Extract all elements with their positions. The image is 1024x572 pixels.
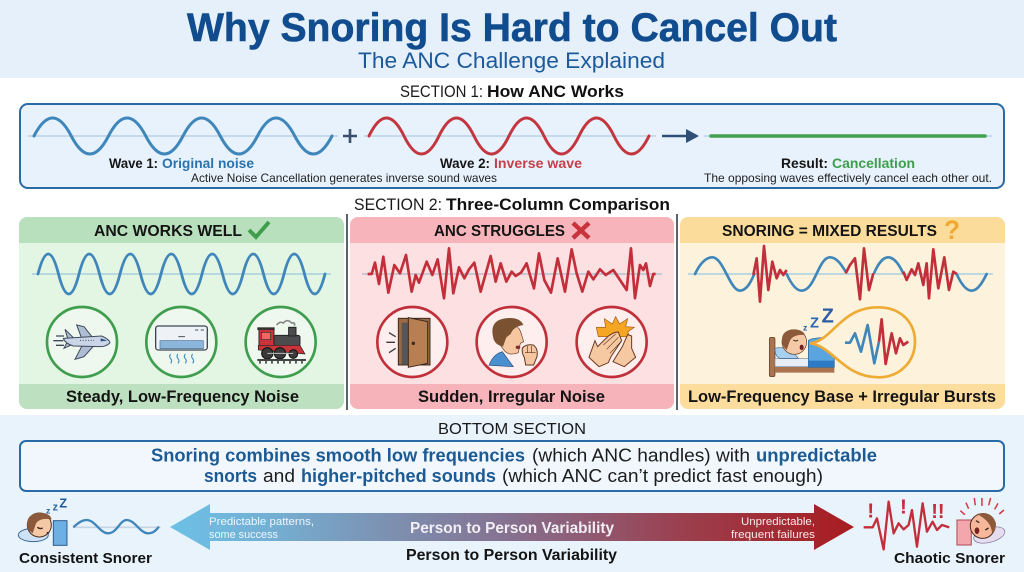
- section 1 heading: How ANC Works: [487, 83, 624, 101]
- bottom section: [0, 415, 1024, 572]
- section 1 heading: [400, 83, 624, 101]
- heading: ANC STRUGGLES: [434, 223, 565, 240]
- arrow text: unpredictable: [731, 516, 816, 541]
- arrow text: predictable: [209, 516, 314, 541]
- label: wave 1: Original noise: [162, 155, 254, 171]
- footer label: Sudden, Irregular Noise: [418, 388, 605, 406]
- wave 2: inverse wave: [369, 118, 649, 154]
- icon: consistent snorer: z: [46, 505, 51, 515]
- icon: cross mark: [573, 223, 589, 238]
- icon: slamming door: [377, 307, 447, 377]
- irregular wave: [368, 248, 656, 298]
- caption: active noise cancellation: Active Noise Cancellation generates inverse sound waves: [191, 171, 497, 185]
- subtitle: The ANC Challenge Explained: [358, 48, 665, 73]
- section 2 heading: [354, 196, 670, 214]
- mixed wave: [695, 246, 987, 302]
- panel: ANC works well: [19, 217, 344, 409]
- steady wave: [38, 254, 325, 294]
- callout: snoring summary: Snoring combines smooth low frequencies: [151, 446, 525, 466]
- arrow to result: [662, 129, 699, 143]
- variability arrow: [170, 504, 854, 550]
- arrow text: centre: Person to Person Variability: [410, 520, 614, 537]
- callout: snoring summary: (which ANC can’t predict fast enough): [502, 466, 823, 486]
- illustration: snorer in bed with sound bubble: [769, 306, 915, 377]
- illustration: snorer in bed with sound bubble: Z: [822, 306, 834, 328]
- result: flat cancelled line: [711, 134, 985, 138]
- icon: consistent snorer: z: [53, 502, 58, 514]
- chaotic wave with exclamation marks: !: [900, 495, 907, 518]
- label: wave 1: Wave 1:: [109, 155, 158, 171]
- label: wave 2: [440, 155, 582, 171]
- arrow text: predictable: Predictable patterns,: [209, 516, 314, 528]
- chaotic wave with exclamation marks: !: [867, 499, 874, 522]
- callout: snoring summary: [20, 441, 1004, 491]
- callout: snoring summary: snorts: [204, 466, 257, 486]
- label: consistent snorer: Consistent Snorer: [19, 550, 152, 567]
- arrow text: unpredictable: Unpredictable,: [741, 516, 815, 528]
- arrow text: predictable: some success: [209, 529, 278, 541]
- heading: SNORING = MIXED RESULTS: [722, 223, 937, 240]
- label: wave 1: [109, 155, 254, 171]
- caption: opposing waves: The opposing waves effectively cancel each other out.: [704, 171, 992, 185]
- header band: [0, 0, 1024, 78]
- label: result: Cancellation: [832, 155, 915, 171]
- section 2 heading: Three-Column Comparison: [446, 196, 670, 214]
- label: result: Result:: [781, 155, 828, 171]
- icon: consistent snorer: [18, 496, 67, 545]
- icon: air conditioner: [146, 307, 216, 377]
- icon: airplane: [47, 307, 117, 377]
- callout: snoring summary: (which ANC handles) with: [532, 446, 750, 466]
- footer label: Low-Frequency Base + Irregular Bursts: [688, 388, 996, 406]
- icon: check mark: [249, 222, 269, 237]
- icon: train: [246, 307, 316, 377]
- label: chaotic snorer: Chaotic Snorer: [894, 550, 1005, 567]
- icon: clapping hands: [577, 307, 647, 377]
- heading: ANC WORKS WELL: [94, 223, 242, 240]
- panel: snoring mixed results: [680, 215, 1005, 409]
- label: result: [781, 155, 915, 171]
- title: Why Snoring Is Hard to Cancel Out: [187, 6, 837, 50]
- illustration: snorer in bed with sound bubble: Z: [810, 315, 819, 331]
- chaotic wave with exclamation marks: [864, 495, 949, 549]
- section 2 heading: SECTION 2:: [354, 196, 442, 214]
- callout: snoring summary: higher-pitched sounds: [301, 466, 496, 486]
- label: wave 2: Wave 2:: [440, 155, 490, 171]
- icon: question mark: ?: [944, 215, 960, 245]
- section 1 heading: SECTION 1:: [400, 83, 483, 101]
- label: person to person variability: Person to Person Variability: [406, 547, 617, 564]
- wave 1: original noise: [34, 118, 332, 154]
- callout: snoring summary: unpredictable: [756, 446, 877, 466]
- arrow text: unpredictable: frequent failures: [731, 529, 816, 541]
- icon: chaotic snorer: [957, 498, 1007, 546]
- panel: ANC struggles: [350, 217, 674, 409]
- callout: snoring summary: and: [263, 466, 295, 486]
- footer label: Steady, Low-Frequency Noise: [66, 388, 299, 406]
- icon: consistent snorer: Z: [59, 496, 67, 510]
- small steady wave: [74, 520, 161, 533]
- icon: coughing person: [477, 307, 547, 377]
- bottom section heading: BOTTOM SECTION: [438, 421, 586, 438]
- panel: how ANC works: [20, 104, 1004, 188]
- chaotic wave with exclamation marks: !!: [931, 501, 945, 523]
- label: wave 2: Inverse wave: [494, 155, 582, 171]
- plus sign: [343, 129, 357, 143]
- illustration: snorer in bed with sound bubble: z: [803, 323, 808, 333]
